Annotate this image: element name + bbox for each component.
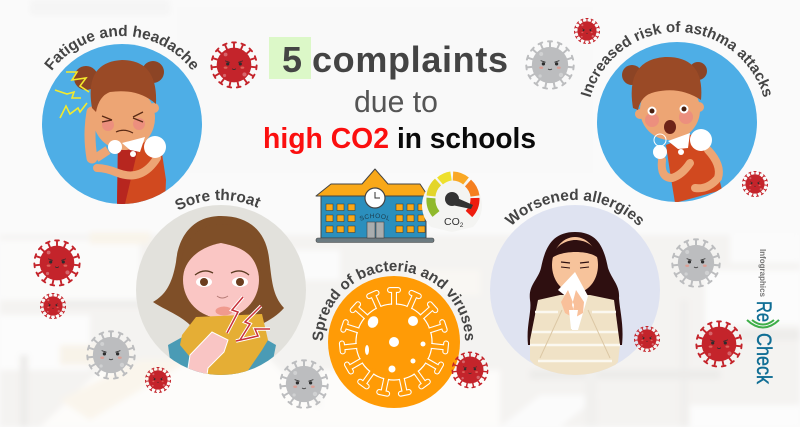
virus: red left (34, 240, 80, 285)
icon: white outline virus (342, 290, 446, 394)
panel: worsened allergies (490, 188, 660, 375)
icon: school building: SCHOOL (360, 214, 390, 221)
circle background (490, 205, 660, 375)
circle background (42, 44, 202, 204)
panel: increased risk of asthma attacks (580, 21, 771, 202)
virus: grey right (672, 239, 720, 287)
virus: red lower right (696, 321, 742, 366)
virus: small red beside allergies circle (634, 327, 660, 351)
logo: ReCheck infographics: Check (752, 333, 775, 384)
logo: ReCheck infographics (747, 249, 779, 384)
illustration: woman sneezing (528, 232, 623, 376)
panel: fatigue and headache (42, 24, 202, 204)
virus: red top centre-left (211, 42, 257, 87)
logo: ReCheck infographics: Re (752, 301, 775, 322)
heading: worsened allergies: Worsened allergies (504, 188, 643, 226)
title: in schools (397, 123, 536, 155)
icon: school building (316, 168, 434, 243)
illustration: girl with headache (55, 60, 166, 204)
virus: grey lower left (87, 331, 135, 379)
icon: CO2 gauge: 2 (460, 222, 464, 229)
virus: small red right of asthma circle (742, 172, 768, 196)
circle background (597, 42, 757, 202)
heading: fatigue and headache: Fatigue and headache (44, 24, 198, 70)
heading: spread of bacteria and viruses: Spread of bacteria and viruses (312, 260, 474, 341)
title: high CO2 (263, 123, 389, 155)
virus: small red top (574, 19, 600, 43)
circle background (136, 205, 306, 375)
title: 5 (282, 39, 302, 80)
heading: sore throat: Sore throat (175, 188, 261, 210)
virus: small red lower left (145, 368, 171, 392)
heading: increased risk of asthma attacks: Increased risk of asthma attacks (580, 21, 771, 97)
virus: red beside orange circle (452, 352, 488, 388)
virus: grey bottom centre (280, 360, 328, 408)
circle background (328, 276, 460, 408)
panel: sore throat (136, 188, 306, 375)
virus: small red left (40, 294, 66, 318)
logo: ReCheck infographics: Infographics (758, 249, 768, 297)
icon: CO2 gauge: CO (444, 216, 460, 228)
virus: grey top centre-right (526, 41, 574, 89)
title highlight box (269, 37, 311, 79)
title (263, 37, 536, 155)
panel: spread of bacteria and viruses (312, 260, 474, 408)
icon: CO2 gauge (422, 176, 482, 232)
illustration: girl short of breath (622, 57, 722, 203)
title: due to (354, 84, 438, 119)
title: complaints (312, 39, 508, 80)
illustration: woman with sore throat (153, 216, 284, 375)
